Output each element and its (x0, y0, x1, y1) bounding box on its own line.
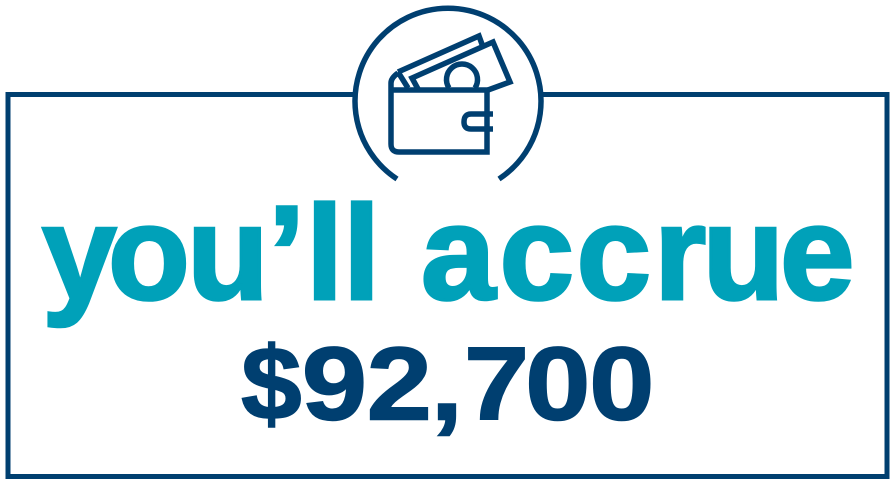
amount: digits: 92,700 (302, 326, 655, 442)
icon: circle arc (355, 8, 541, 179)
amount: dollar sign: $ (241, 325, 302, 442)
panel: outlined box (8, 94, 887, 476)
icon: front banknote (412, 42, 510, 90)
amount: $92,700 (241, 325, 655, 442)
icon: back banknote (398, 36, 483, 88)
icon: wallet body (391, 73, 487, 152)
heading: you'll accrue: you’ll accrue (42, 179, 855, 328)
icon: coin (446, 64, 477, 88)
icon: wallet in circle (355, 8, 541, 179)
icon: wallet clasp (464, 114, 493, 129)
